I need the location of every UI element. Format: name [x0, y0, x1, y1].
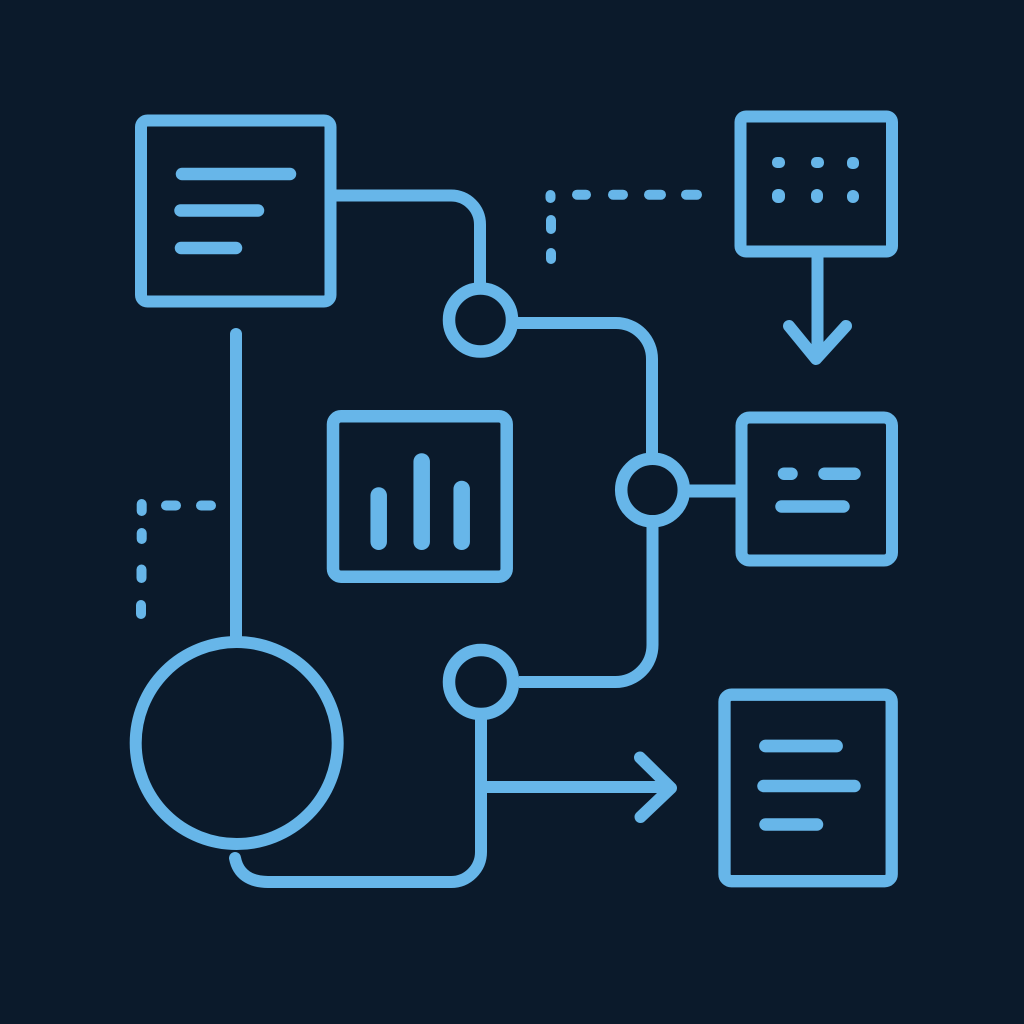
connector: large circle to bottom node: [235, 716, 481, 882]
node: top circle: [449, 288, 512, 352]
panel: bottom-right document: [724, 695, 892, 881]
dashed connector: top: [550, 195, 697, 259]
node: large circle: [136, 642, 338, 844]
connector: top node to middle node: [517, 323, 652, 455]
dashed connector: left: [141, 504, 211, 614]
node: middle circle: [621, 459, 684, 521]
panel: middle-right face: [742, 418, 892, 560]
arrow: to bottom-right document: [486, 758, 671, 817]
connector: middle node to bottom node: [519, 525, 652, 682]
arrow: grid to face panel: [789, 256, 846, 359]
panel: top-left document: [141, 120, 330, 302]
panel: top-right grid: [740, 116, 892, 252]
connector: middle node to face panel: [689, 484, 738, 498]
node: bottom circle: [449, 650, 513, 714]
connector: document to top node: [336, 196, 480, 288]
panel: bar chart: [333, 416, 507, 577]
connector: document to large circle: [230, 334, 242, 640]
